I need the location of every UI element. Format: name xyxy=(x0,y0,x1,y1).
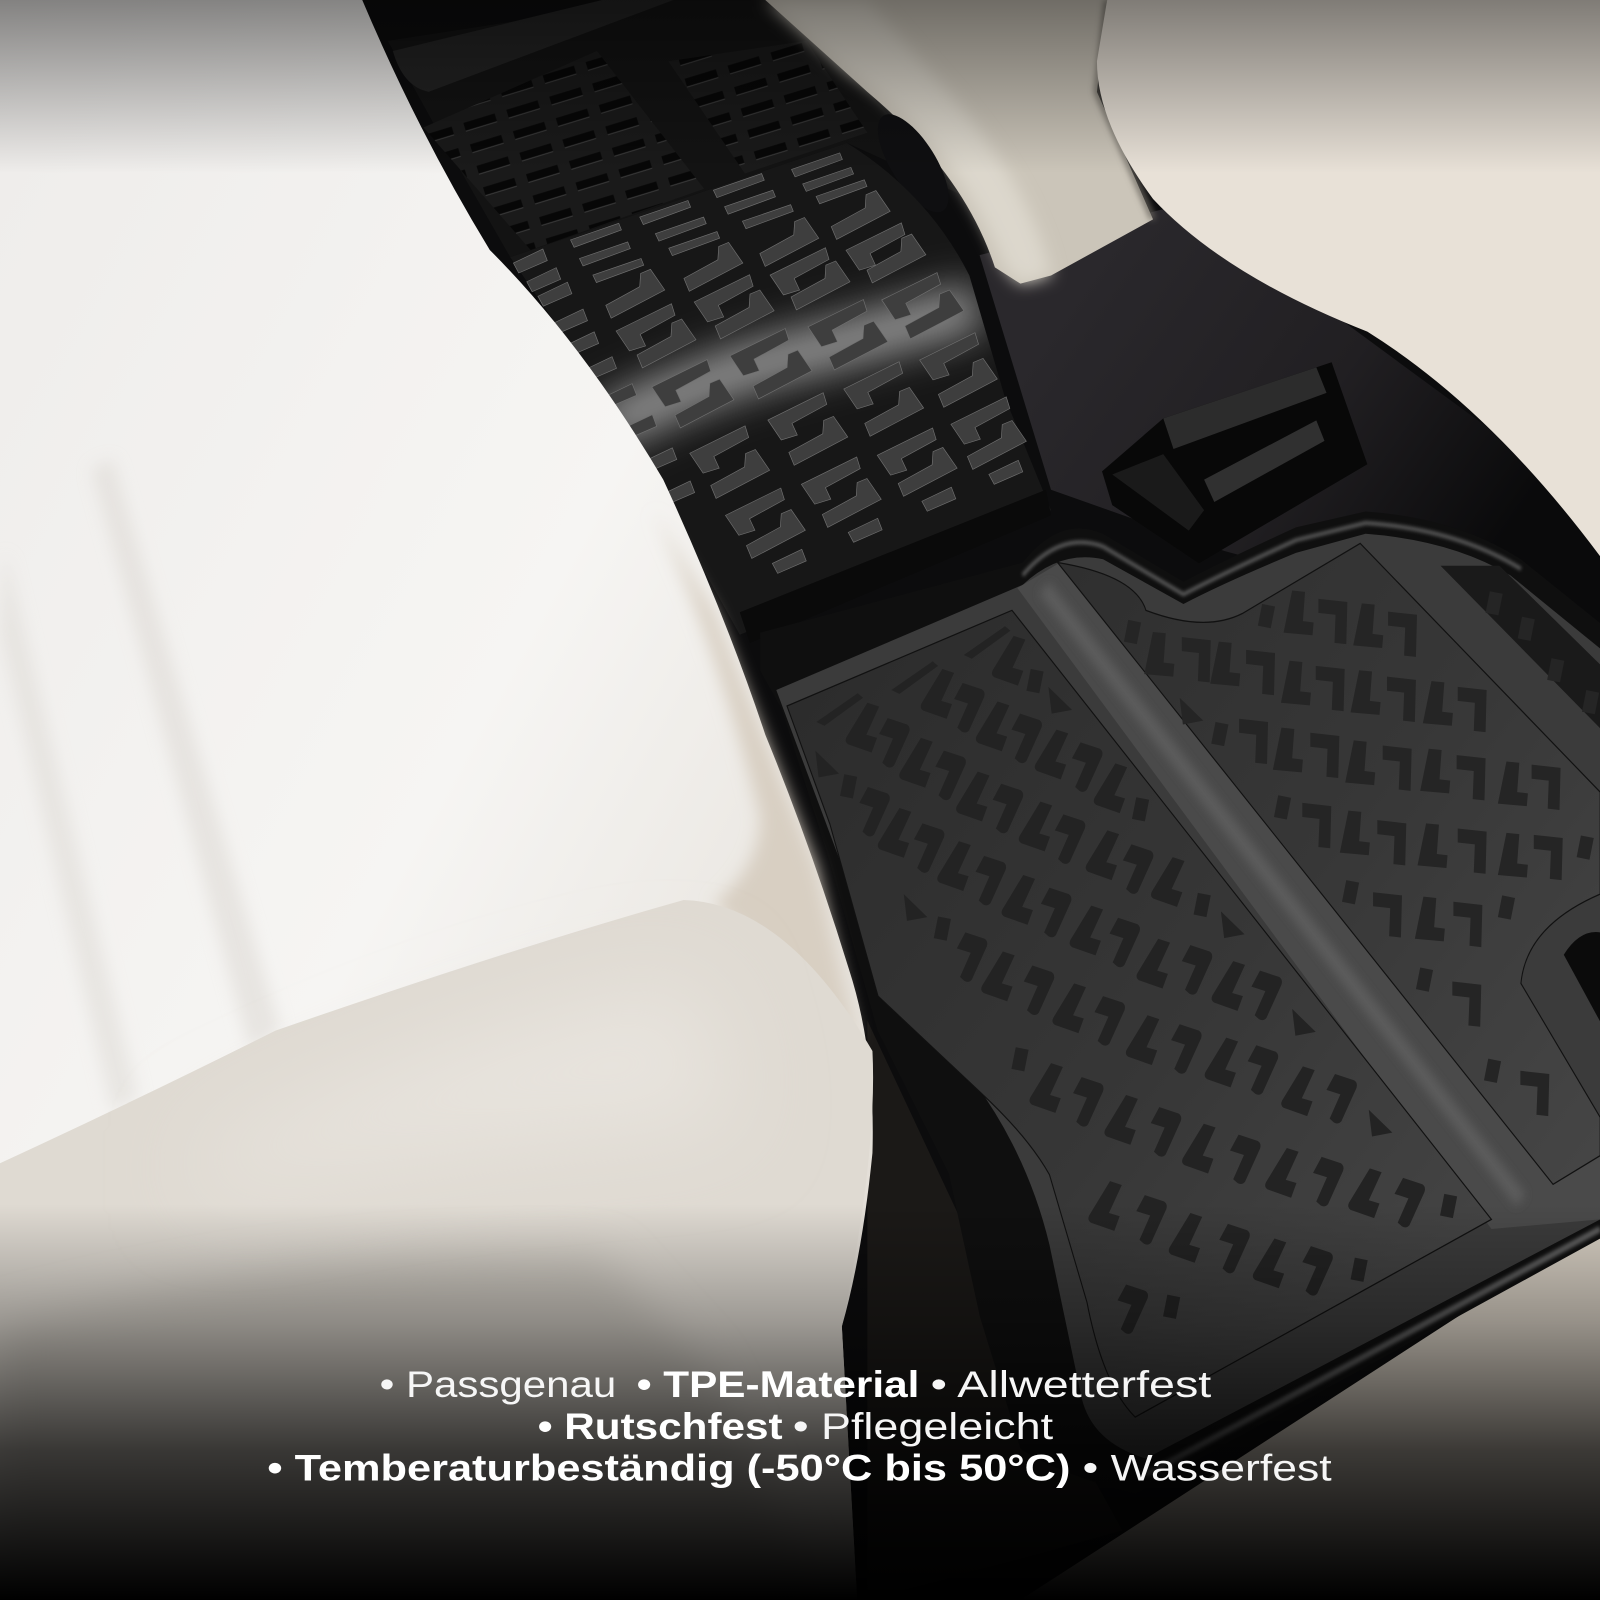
front mat inner wall xyxy=(776,534,1600,1459)
seat rail bracket xyxy=(1102,362,1367,563)
centre rib xyxy=(1017,562,1600,1229)
line 1: • Passgenau xyxy=(380,1364,616,1405)
front mat outer shell xyxy=(760,511,1600,1494)
lower rim highlight xyxy=(1146,1229,1600,1474)
rim highlight xyxy=(1023,523,1521,594)
outer bolster shading xyxy=(653,510,857,1041)
line 1: • Allwetterfest xyxy=(931,1364,1211,1405)
carpet xyxy=(980,204,1600,653)
rear mat tread right xyxy=(668,41,867,173)
cushion highlight xyxy=(204,980,735,1194)
rear floor mat xyxy=(388,0,959,257)
line 1: • TPE-Material xyxy=(637,1364,919,1405)
right tray lugs xyxy=(1124,591,1599,1116)
back panel seam shading xyxy=(92,459,281,1051)
front floor mat xyxy=(760,511,1600,1494)
side pocket xyxy=(1441,566,1600,728)
line 3: • Wasserfest xyxy=(1083,1448,1332,1489)
lower carpet xyxy=(867,1020,1122,1600)
seat base xyxy=(0,0,873,1600)
console light strip xyxy=(765,0,1051,284)
line 3 xyxy=(267,1448,1332,1489)
centre console trim xyxy=(765,0,1153,284)
middle mat highlight band xyxy=(602,306,980,429)
console and seat gap shadow xyxy=(1097,0,1153,219)
line 1 xyxy=(380,1364,1211,1405)
middle mat base xyxy=(510,143,1051,635)
left seat xyxy=(0,0,873,1600)
left tray lugs xyxy=(815,626,1457,1334)
floor cut-out xyxy=(1564,932,1600,1022)
bottom right seat xyxy=(1020,1224,1600,1600)
line 2: • Pflegeleicht xyxy=(793,1406,1053,1447)
left tray xyxy=(787,610,1491,1417)
middle mat lugs xyxy=(513,153,1026,573)
second seam shading xyxy=(0,551,138,1112)
rear mat lip xyxy=(393,0,673,92)
top right seat xyxy=(1097,0,1600,556)
line 3: • Temberaturbeständig (-50°C bis 50°C) xyxy=(267,1448,1070,1489)
rear mat tread left xyxy=(423,51,704,250)
cushion shadow xyxy=(0,1254,816,1600)
lower cushion xyxy=(0,900,873,1600)
top shadow overlay xyxy=(0,0,1600,173)
bottom shadow overlay xyxy=(0,1204,1600,1600)
middle floor mat xyxy=(510,143,1051,643)
line 2 xyxy=(538,1406,1053,1447)
feature text xyxy=(267,1364,1332,1489)
middle mat front lip xyxy=(740,490,1051,643)
rib highlight xyxy=(1044,588,1521,1200)
console vent xyxy=(864,104,962,223)
line 2: • Rutschfest xyxy=(538,1406,783,1447)
right tray xyxy=(1058,543,1600,1184)
